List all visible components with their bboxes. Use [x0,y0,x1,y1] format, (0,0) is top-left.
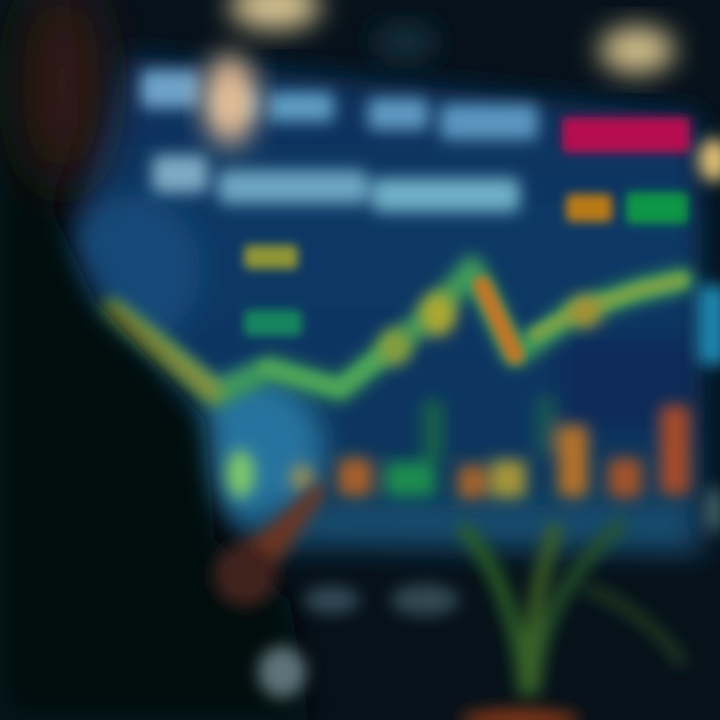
viewer silhouette [0,0,310,720]
screen panel [60,55,705,555]
legend: green label [244,310,302,336]
heading: blurred title text [140,70,538,212]
legend: yellow label [244,245,298,269]
lower blurred objects [258,486,720,720]
badge: crimson [562,117,690,153]
badge: green [626,192,688,224]
plant [465,525,680,690]
right edge blue element [697,285,720,365]
badge: orange [566,194,612,222]
line chart [110,268,682,395]
lights [204,0,720,182]
bar chart [225,395,690,499]
hand [213,478,325,607]
